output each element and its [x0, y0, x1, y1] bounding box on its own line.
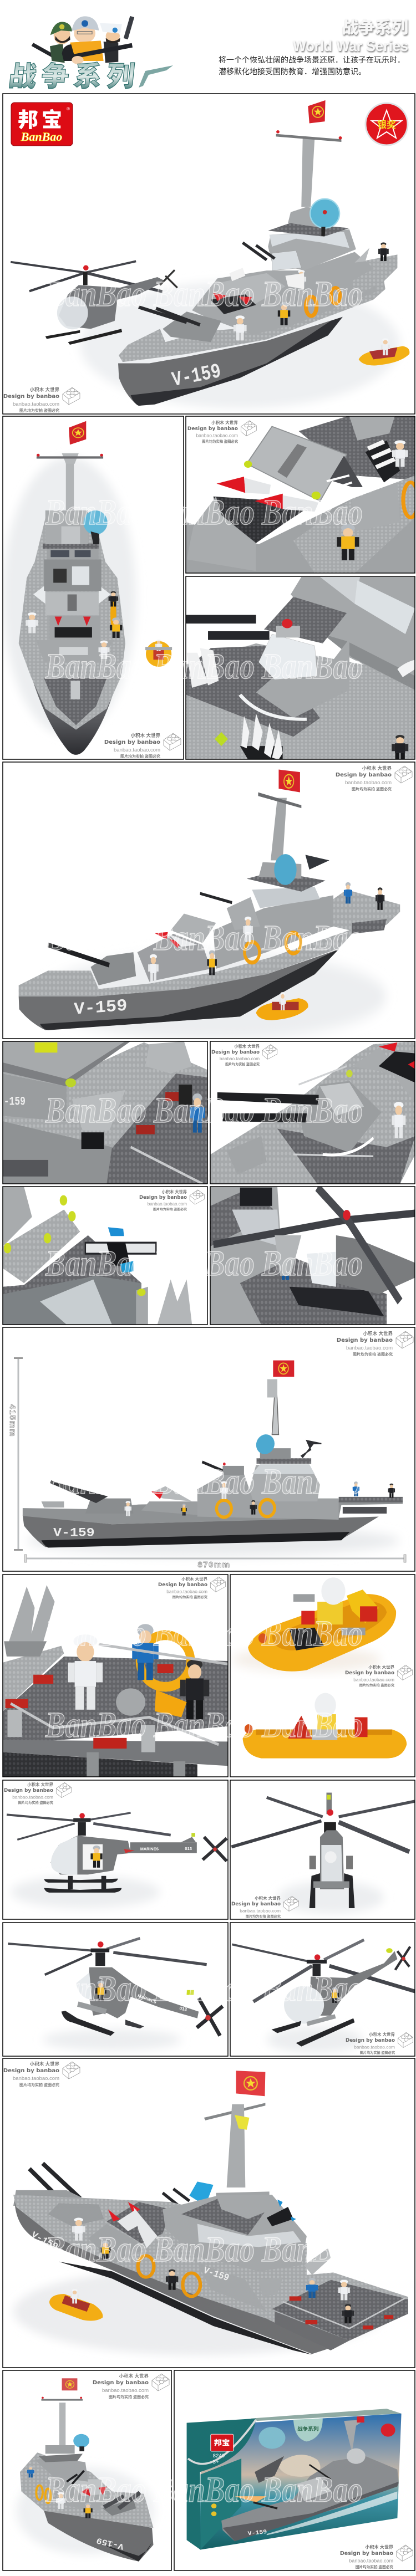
width dimension: 870mm: 870mm: [197, 1560, 231, 1570]
brand logo: BanBao: BanBao: [21, 130, 62, 144]
watermark credit: banbao.taobao.com: [13, 2076, 59, 2082]
photo: ship viewed from the bow: V-159: [95, 2536, 125, 2551]
watermark credit: 图片均为实拍 盗图必究: [225, 1062, 260, 1066]
watermark credit: [104, 733, 181, 759]
watermark credit: 小积木 大世界: [368, 1664, 395, 1669]
photo: rotating missile mount on rear deck: -159: [4, 1095, 26, 1108]
panel: bow gun detail: [210, 1041, 415, 1184]
photo: helicopter rear quarter: MARINES: [137, 1993, 157, 2005]
panel: product box: [174, 2370, 415, 2570]
panel: bow three-quarter ship view: [3, 2370, 171, 2570]
photo: ship, helicopter, boat: V-159: [170, 360, 223, 392]
photo: ship with lifeboat: [19, 770, 400, 1040]
watermark credit: [3, 387, 80, 413]
watermark credit: [3, 2061, 80, 2087]
photo: yellow inflatable boat: [232, 1577, 407, 1759]
watermark credit: [231, 1895, 299, 1919]
panel: rear deck detail: [3, 1041, 208, 1184]
photo: elevated ship view with boat: [13, 2071, 408, 2355]
photo: ship, helicopter, boat: [11, 100, 409, 408]
frame: [3, 762, 415, 1039]
frame: [186, 416, 415, 573]
watermark credit: Design by banbao: [93, 2380, 149, 2386]
watermark credit: 图片均为实拍 盗图必究: [353, 1352, 393, 1357]
panel: crew on rear deck: [3, 1575, 228, 1777]
photo: helicopter rear quarter: [8, 1938, 222, 2051]
photo: helicopter profile: [7, 1813, 227, 1908]
watermark credit: Design by banbao: [346, 2038, 395, 2043]
frame: [230, 1923, 415, 2056]
watermark credit: 图片均为实拍 盗图必究: [359, 1683, 394, 1688]
watermark credit: [158, 1576, 226, 1599]
panel: three-quarter ship view: [3, 762, 415, 1040]
watermark credit: Design by banbao: [231, 1902, 281, 1907]
frame: [3, 1923, 228, 2056]
watermark credit: [139, 1189, 204, 1212]
panel: top-down ship view: [3, 416, 184, 759]
watermark credit: 小积木 大世界: [365, 2544, 393, 2550]
series title Chinese: 战争系列: [342, 19, 408, 37]
header: series logo with soldier figures: [7, 16, 173, 92]
photo: retail box artwork: 8240: [213, 2453, 225, 2459]
watermark credit: [340, 2544, 413, 2569]
watermark credit: [93, 2373, 169, 2399]
watermark credit: [337, 1331, 413, 1357]
photo: ship with lifeboat: V-159: [74, 996, 128, 1019]
watermark credit: 图片均为实拍 盗图必究: [18, 1801, 53, 1805]
watermark credit: [345, 1664, 413, 1688]
watermark credit: Design by banbao: [158, 1582, 207, 1588]
panel: helicopter front view: [230, 1780, 415, 1919]
panel: main ship and helicopter photo: [3, 94, 415, 414]
watermark credit: banbao.taobao.com: [345, 780, 392, 786]
watermark credit: 小积木 大世界: [369, 2031, 395, 2037]
watermark credit: Design by banbao: [336, 772, 392, 778]
watermark credit: 小积木 大世界: [211, 420, 238, 425]
icon: three minifigure soldiers with guns: [32, 16, 132, 64]
panel: elevated ship view: [3, 2058, 415, 2368]
photo: ship in side profile: [23, 1361, 403, 1556]
brand logo: BanBao: 邦宝: [18, 109, 65, 131]
brand logo: BanBao: ®: [67, 106, 70, 111]
photo: missile launcher with arrows: [186, 416, 416, 573]
watermark credit: Design by banbao: [3, 2068, 59, 2074]
watermark credit: 图片均为实拍 盗图必究: [360, 2051, 395, 2055]
frame: [3, 94, 415, 414]
watermark credit: banbao.taobao.com: [166, 1588, 207, 1594]
watermark credit: Design by banbao: [337, 1337, 393, 1343]
photo: helicopter rotor over deck: [210, 1187, 415, 1325]
watermark credit: 图片均为实拍 盗图必究: [202, 438, 239, 443]
watermark: repeated BanBao overlay across photos: [45, 274, 363, 2510]
frame: [230, 1575, 415, 1777]
watermark credit: 小积木 大世界: [131, 733, 160, 738]
watermark credit: Design by banbao: [139, 1195, 187, 1200]
photo: retail box artwork: 3+: [213, 2459, 219, 2465]
watermark credit: 图片均为实拍 盗图必究: [19, 408, 59, 413]
series description: 将一个个恢弘壮阔的战争场景还原．让孩子在玩乐时．: [219, 55, 405, 64]
watermark credit: banbao.taobao.com: [240, 1908, 281, 1913]
frame: [230, 1780, 415, 1919]
watermark credit: 小积木 大世界: [181, 1576, 208, 1581]
photo: retail box artwork: 邦宝: [214, 2439, 230, 2447]
watermark credit: banbao.taobao.com: [13, 401, 59, 407]
photo: minifigures with life ring: [3, 1585, 228, 1776]
height dimension: 415mm: 415mm: [8, 1404, 17, 1437]
watermark credit: banbao.taobao.com: [196, 433, 238, 438]
photo: rotating missile mount on rear deck: [3, 1041, 208, 1184]
frame: [3, 1041, 207, 1184]
watermark credit: 小积木 大世界: [362, 765, 392, 771]
watermark credit: 图片均为实拍 盗图必究: [173, 1595, 207, 1599]
panel: helicopter on deck detail: [210, 1187, 415, 1325]
series title English: World War Series: [293, 38, 408, 54]
photo: helicopter profile: MARINES: [140, 1847, 159, 1852]
watermark credit: 图片均为实拍 盗图必究: [356, 2564, 393, 2569]
photo: bow twin guns: [210, 1041, 415, 1184]
award medal: silver prize: [366, 103, 408, 145]
frame: [3, 1327, 415, 1571]
series description: [219, 55, 405, 76]
watermark credit: 小积木 大世界: [30, 387, 59, 392]
photo: top view of ship: [3, 421, 172, 755]
watermark credit: 图片均为实拍 盗图必究: [120, 754, 160, 759]
photo: helicopter rear quarter: 013: [179, 2006, 187, 2012]
watermark credit: [346, 2031, 413, 2055]
brand logo: BanBao: [11, 103, 73, 146]
frame: [3, 1780, 228, 1919]
frame: [3, 1187, 207, 1325]
watermark credit: [187, 420, 256, 443]
watermark credit: [336, 765, 412, 791]
watermark credit: 小积木 大世界: [119, 2373, 149, 2379]
frame: [3, 2058, 415, 2368]
frame: [174, 2370, 415, 2570]
watermark credit: banbao.taobao.com: [102, 2388, 149, 2394]
frame: [210, 1187, 415, 1325]
width dimension: 870mm: [24, 1555, 406, 1570]
watermark credit: 图片均为实拍 盗图必究: [352, 786, 392, 791]
watermark credit: 小积木 大世界: [363, 1331, 393, 1336]
photo: ship in side profile: V-159: [53, 1527, 95, 1540]
watermark credit: banbao.taobao.com: [148, 1202, 187, 1207]
watermark credit: [4, 1781, 72, 1805]
watermark credit: banbao.taobao.com: [354, 2044, 395, 2049]
photo: helicopter from the front: [231, 1793, 415, 1914]
photo: twin gun cabin: [186, 577, 415, 761]
panel: helicopter side view: [3, 1780, 228, 1919]
watermark credit: banbao.taobao.com: [12, 1794, 53, 1800]
frame: [186, 576, 415, 759]
award medal: silver prize: 银奖: [377, 119, 396, 130]
watermark credit: [211, 1044, 277, 1066]
photo: ship viewed from the bow: [16, 2378, 155, 2562]
photo: elevated ship view with boat: V-159: [201, 2265, 231, 2284]
panel: gun turret detail: [186, 576, 415, 761]
photo: helicopter profile: 013: [185, 1846, 192, 1851]
panel: lifeboat views: [230, 1575, 415, 1777]
photo: retail box artwork: 战争系列: [297, 2426, 319, 2432]
watermark credit: 小积木 大世界: [234, 1044, 260, 1049]
watermark credit: banbao.taobao.com: [114, 747, 160, 753]
watermark credit: 图片均为实拍 盗图必究: [246, 1914, 281, 1919]
title: 战争系列 slanted logotype: 战争系列: [7, 61, 141, 92]
photo: helicopter front quarter: [232, 1940, 415, 2053]
frame: [3, 1575, 228, 1777]
photo: elevated ship view with boat: V-159: [29, 2230, 60, 2252]
photo: retail box artwork: [187, 2409, 402, 2550]
watermark credit: banbao.taobao.com: [346, 1345, 393, 1351]
watermark credit: Design by banbao: [340, 2551, 393, 2557]
watermark credit: Design by banbao: [3, 393, 59, 400]
watermark credit: Design by banbao: [211, 1050, 260, 1055]
series description: 潜移默化地接受国防教育．增强国防意识。: [219, 67, 366, 76]
watermark credit: 图片均为实拍 盗图必究: [19, 2082, 59, 2087]
frame: [3, 416, 184, 759]
watermark credit: banbao.taobao.com: [220, 1056, 260, 1061]
watermark credit: 小积木 大世界: [27, 1781, 54, 1787]
frame: [3, 2370, 171, 2570]
watermark credit: 图片均为实拍 盗图必究: [109, 2394, 149, 2399]
watermark credit: Design by banbao: [104, 739, 160, 745]
panel: radar gun platform detail: [3, 1187, 207, 1325]
watermark credit: 小积木 大世界: [255, 1895, 281, 1900]
panel: side view with dimensions: [3, 1327, 415, 1571]
frame: [210, 1041, 415, 1184]
height dimension: 415mm: [8, 1357, 23, 1551]
photo: retail box artwork: V-159: [247, 2529, 267, 2537]
panel: helicopter front quarter view: [230, 1923, 415, 2056]
panel: helicopter rear quarter view: [3, 1923, 228, 2056]
heading: right series title: [219, 19, 408, 76]
panel: missile launcher detail: [186, 416, 416, 573]
watermark credit: 图片均为实拍 盗图必究: [153, 1207, 187, 1212]
watermark credit: Design by banbao: [4, 1788, 53, 1793]
watermark credit: banbao.taobao.com: [349, 2558, 393, 2563]
watermark credit: 小积木 大世界: [162, 1189, 187, 1194]
photo: bridge top with rotating weapon: [3, 1187, 192, 1325]
watermark credit: 小积木 大世界: [30, 2061, 59, 2067]
watermark credit: banbao.taobao.com: [353, 1677, 394, 1682]
watermark credit: Design by banbao: [345, 1670, 394, 1676]
watermark credit: Design by banbao: [187, 426, 238, 432]
